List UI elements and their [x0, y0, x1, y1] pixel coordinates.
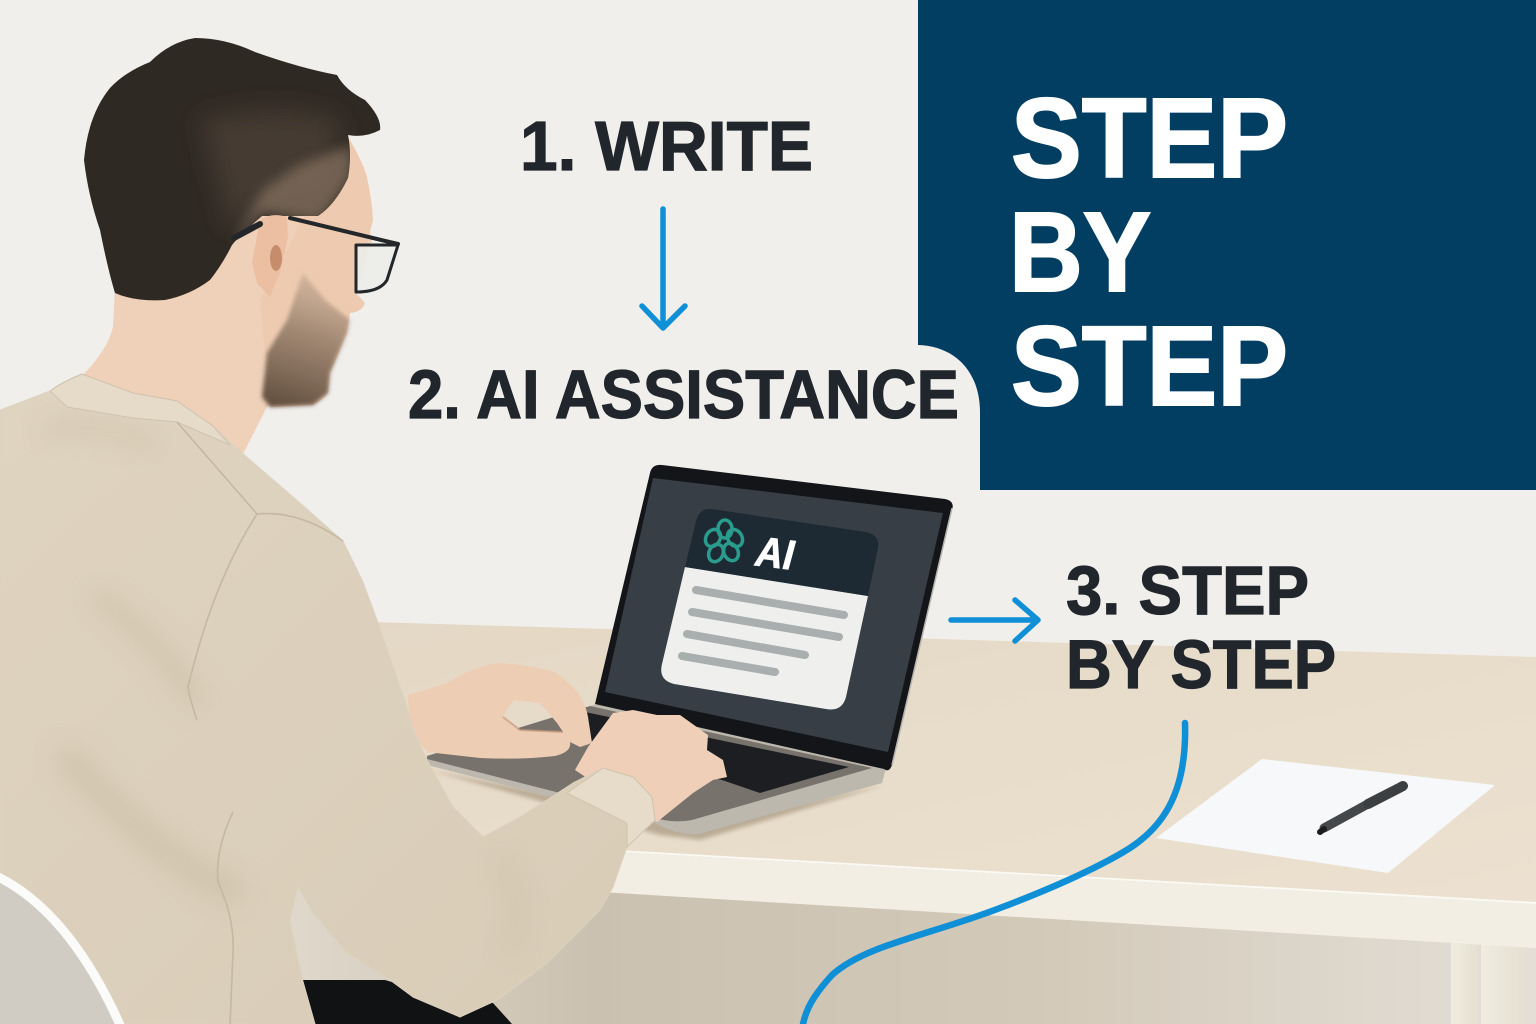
front hand	[575, 710, 727, 822]
window header	[685, 509, 878, 596]
arrow: right to step 3	[951, 600, 1038, 641]
chair	[0, 873, 124, 1024]
desk	[340, 621, 1536, 948]
label: 2. AI assistance: 2. AI ASSISTANCE	[408, 356, 959, 433]
pen	[1320, 786, 1403, 832]
neck	[60, 130, 372, 460]
sweater collar	[50, 374, 230, 445]
ear	[252, 215, 288, 297]
label: 3. step by step: 3. STEP	[1066, 552, 1309, 629]
under-desk area	[280, 760, 1536, 1024]
laptop shadow	[430, 770, 885, 840]
face	[260, 135, 373, 407]
title: step by step: STEP	[1011, 75, 1288, 201]
label: 3. step by step	[1066, 552, 1336, 703]
sweater seams	[177, 422, 343, 1024]
label: 1. write: 1. WRITE	[520, 107, 813, 185]
text lines	[682, 590, 844, 672]
back hand	[408, 663, 592, 759]
glasses	[234, 218, 398, 292]
keyboard	[575, 712, 849, 793]
title: step by step: BY	[1009, 189, 1151, 315]
laptop lid	[595, 465, 953, 770]
AI window	[661, 509, 878, 710]
AI label: AI	[751, 528, 801, 578]
arrow: down to step 2	[642, 209, 685, 328]
trousers	[300, 980, 512, 1024]
title: step by step	[1009, 75, 1288, 429]
person	[0, 30, 727, 1024]
navy title panel	[918, 0, 1536, 490]
laptop	[427, 465, 953, 840]
desk legs	[1451, 935, 1525, 1024]
sweater body	[0, 374, 655, 1024]
cuff	[567, 768, 655, 847]
window body	[661, 567, 868, 710]
thumb shading	[503, 717, 563, 732]
screen	[605, 478, 943, 752]
paper and pen	[1156, 759, 1495, 873]
sweater shading	[50, 427, 518, 950]
beard	[262, 273, 350, 407]
title: step by step: STEP	[1011, 303, 1288, 429]
curved blue line	[803, 723, 1185, 1024]
hair	[84, 38, 380, 300]
laptop base	[427, 703, 886, 834]
label: 3. step by step: BY STEP	[1066, 626, 1336, 703]
AI logo	[702, 520, 746, 564]
